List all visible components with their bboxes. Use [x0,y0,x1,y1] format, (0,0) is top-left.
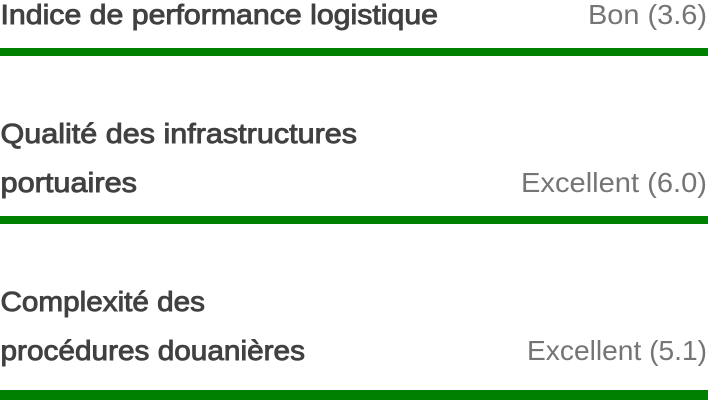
green bar [0,390,708,400]
green bar [0,216,708,224]
row: Complexité des procédures douanières [0,286,708,400]
label: Complexité des procédures douanières: Complexité des [0,286,205,317]
value: Excellent (5.1): Excellent (5.1) [527,335,707,366]
label: Qualité des infrastructures portuaires: Qualité des infrastructures [0,118,357,149]
green bar [0,48,708,56]
label: Qualité des infrastructures portuaires: portuaires [0,167,137,198]
row: Indice de performance logistique [0,0,708,56]
row: Qualité des infrastructures portuaires [0,118,708,224]
label: Complexité des procédures douanières: procédures douanières [0,335,305,366]
value: Excellent (6.0): Excellent (6.0) [521,167,707,198]
